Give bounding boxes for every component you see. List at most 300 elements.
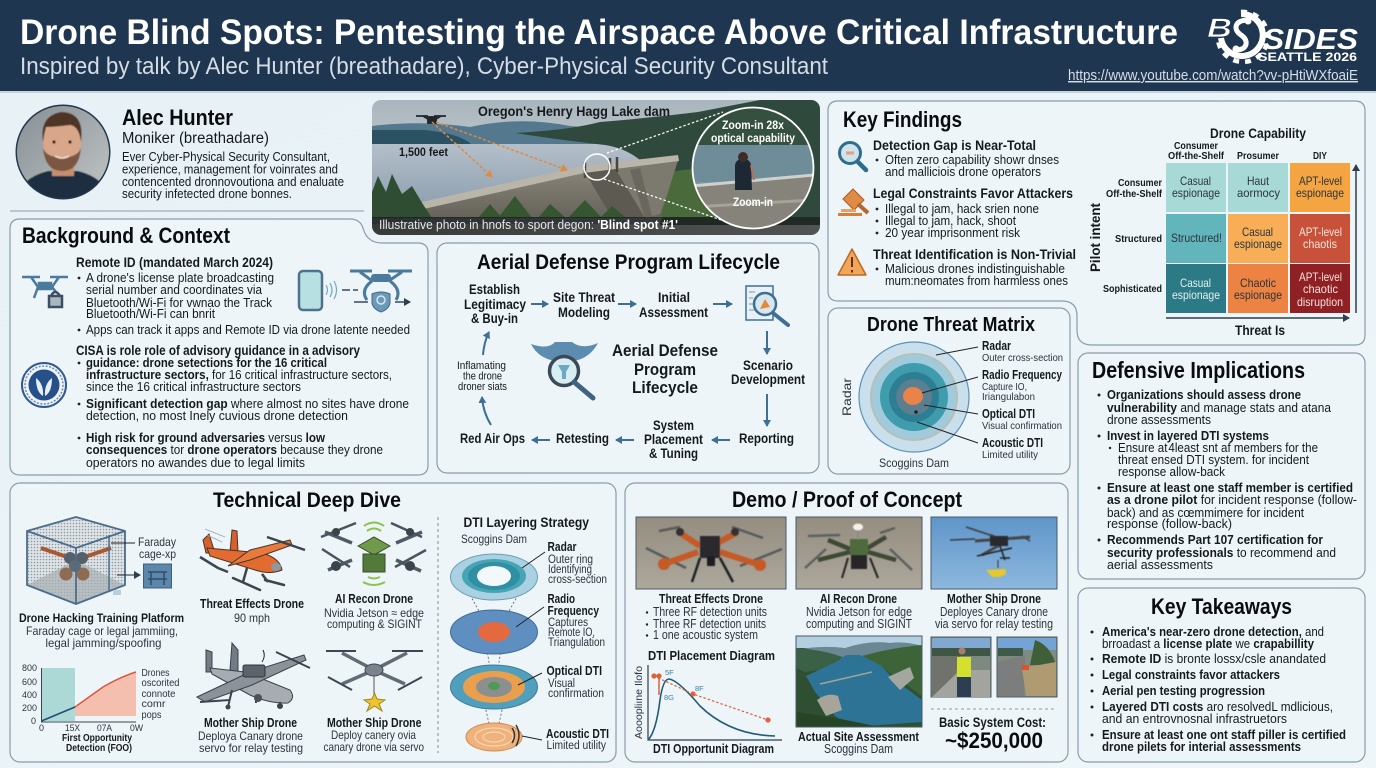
finding: detection gap: and malliciois drone operators — [885, 164, 1041, 179]
step: reporting: Reporting — [739, 431, 794, 446]
layer: radar disk — [450, 554, 538, 600]
matrix cells: aormocy — [1237, 186, 1280, 200]
step: system placement and tuning: System — [653, 418, 694, 433]
heading: technical deep dive: Technical Deep Dive — [213, 489, 401, 512]
video url: https://www.youtube.com/watch?v​v-pHtiWXfoaiE — [1068, 68, 1358, 84]
icon: control box — [117, 564, 172, 588]
step: inflamating the drone: the drone — [463, 370, 502, 382]
label: threat effects drone — [200, 597, 304, 625]
chart annotation: oscorited — [142, 677, 180, 689]
text block: takeaways list: Ensure at least one ont staff piller is certified — [1102, 727, 1346, 742]
text block: implications list: Organizations should assess drone — [1107, 387, 1301, 402]
label: radio frequency layer: Frequency — [548, 603, 600, 618]
text block: takeaways list: Legal constraints favor attackers — [1102, 667, 1280, 682]
text block: training platform: Faraday cage or legal jammiing, — [26, 624, 178, 638]
legend: acoustic dti: Acoustic DTI — [982, 436, 1043, 450]
step: establish legitimacy: Legitimacy — [464, 297, 526, 312]
legend: radio frequency: Capture IO, — [982, 381, 1027, 393]
label: radar layer — [548, 539, 607, 586]
zoom-in labels: Zoom-in 28x — [722, 118, 784, 132]
panel: drone threat matrix — [828, 308, 1070, 474]
text block: training platform: Drone Hacking Training Platform — [19, 611, 184, 625]
step: site threat modeling: Site Threat — [553, 290, 615, 305]
text block: mother ship drone: Mother Ship Drone — [947, 592, 1041, 606]
label: mother ship drone 2: canary drone via servo — [324, 740, 424, 754]
text block: implications list: Ensure at 4least snt af members for the — [1118, 441, 1318, 455]
text block: implications list: Ensure at least one staff member is certified — [1107, 480, 1353, 495]
label: radio frequency layer: Triangulation — [548, 637, 605, 649]
speaker bio: experience, management for voinrates and — [122, 162, 338, 176]
step: initial assessment: Assessment — [639, 305, 708, 320]
finding: legal constraints: Illegal to jam, hack srien none — [885, 201, 1039, 216]
text block: takeaways list: brroadast a license plate we crapabillity — [1102, 636, 1315, 651]
callout: basic system cost — [939, 714, 1046, 753]
heading: dti placement: DTI Placement Diagram — [648, 648, 775, 663]
title: Drone Blind Spots: Pentesting the Airspace Above Critical Infrastructure — [20, 13, 1178, 52]
axis title: threat: Threat Is — [1235, 322, 1285, 338]
speaker moniker: Moniker (breathadare) — [122, 130, 269, 147]
finding: threat identification — [873, 246, 1076, 288]
text block: cisa bullets: infrastructure sectors, for 16 critical infrastructure sectors, — [86, 367, 392, 382]
text block: implications list: Invest in layered DTI systems — [1107, 428, 1269, 443]
matrix cells: Chaotic — [1240, 276, 1276, 290]
label: acoustic layer: Acoustic DTI — [546, 726, 609, 741]
label: faraday cage: Faraday — [138, 535, 176, 549]
step: establish legitimacy: Establish — [469, 282, 520, 297]
panel: key findings — [828, 101, 1365, 345]
finding: legal constraints: Legal Constraints Favor Attackers — [873, 185, 1073, 201]
text block: threat effects drone specs — [646, 592, 767, 642]
panel: technical deep dive — [10, 483, 616, 762]
step: system placement and tuning: & Tuning — [649, 446, 698, 461]
photo: ai recon drone — [796, 517, 922, 589]
text block: cisa bullets: detection, no most Inely cuvious drone detection — [86, 408, 348, 423]
step: scenario development: Scenario — [743, 358, 793, 373]
matrix cells: Haut — [1247, 174, 1270, 188]
label: acoustic layer — [546, 726, 609, 752]
arrow — [766, 394, 768, 426]
zoom-in circle — [584, 107, 814, 230]
zoom-in labels: optical capability — [711, 131, 795, 145]
finding: legal constraints: 20 year imprisonment risk — [885, 225, 1020, 240]
y axis label: Aooopliıne Ilofo — [634, 666, 645, 739]
icon: magnifier — [840, 142, 866, 170]
text block: mother ship drone: Deployes Canary drone — [940, 605, 1048, 619]
layer: optical disk — [450, 665, 538, 709]
photo caption: Illustrative photo in hnofs to sport degon: 'Blind spot #1' — [379, 217, 678, 232]
arrow: vertical axis — [1355, 165, 1357, 313]
arrow — [532, 439, 550, 441]
label: mother ship drone 1: Mother Ship Drone — [204, 716, 297, 730]
layer: radio frequency disk — [450, 610, 538, 654]
speaker bio — [122, 150, 344, 201]
arrows: drone line of sight — [432, 122, 567, 177]
heat map: drone capability vs pilot intent — [1087, 126, 1356, 338]
icon: drone with shield — [342, 271, 412, 312]
chart: first opportunity detection: 600 — [22, 677, 37, 688]
chart: dti placement diagram — [634, 648, 782, 756]
chart annotation: connote — [142, 688, 176, 700]
label: threat effects drone: Threat Effects Drone — [200, 597, 304, 611]
leader lines — [917, 347, 978, 443]
chart annotation: Drones — [142, 667, 170, 679]
step: scenario development — [731, 358, 805, 387]
photo: inspector on dam — [931, 637, 991, 697]
legend: optical dti: Optical DTI — [982, 407, 1035, 421]
legend: radar: Outer cross-section — [982, 352, 1063, 364]
illustration: ai recon drone — [321, 522, 426, 585]
label: mother ship drone 1: servo for relay testing — [199, 741, 303, 755]
step: initial assessment: Initial — [658, 290, 690, 305]
step: system placement and tuning: Placement — [644, 432, 703, 447]
chart: first opportunity detection: 0 — [39, 723, 44, 734]
step: system placement and tuning — [644, 418, 703, 461]
heading: defensive implications: Defensive Implications — [1092, 357, 1305, 383]
finding: detection gap — [873, 137, 1059, 179]
text block: implications list: response allow-back — [1118, 465, 1226, 479]
matrix cells: disruption — [1297, 295, 1343, 309]
step: establish legitimacy: & Buy-in — [471, 311, 518, 326]
photo: mother ship in sky — [931, 517, 1057, 589]
text block: cisa bullets: guidance: drone setections for the 16 critical — [86, 355, 327, 370]
text block: remote id bullets: A drone's license plate broadcasting — [86, 270, 274, 285]
step: scenario development: Development — [731, 372, 805, 387]
legend: acoustic dti: Limited utility — [982, 449, 1039, 461]
icon: drone under magnifier — [531, 342, 598, 398]
icon: drone with lock — [22, 277, 68, 307]
column headers: Prosumer — [1237, 150, 1279, 162]
step: retesting: Retesting — [556, 431, 609, 446]
panel: key takeaways — [1078, 588, 1365, 762]
chart: dti placement diagram: 8F — [695, 684, 704, 693]
logo: BSides Seattle 2026: B — [1207, 13, 1232, 43]
text block: site assessment: Actual Site Assessment — [798, 729, 920, 744]
column headers: Off-the-Shelf — [1168, 150, 1224, 162]
text block: mother ship drone — [935, 592, 1053, 631]
icon: document with magnifier — [746, 286, 788, 325]
text block: implications list: back) and as cœmmimere for incident — [1107, 505, 1304, 520]
chart annotation: comr — [142, 698, 166, 710]
label: radio frequency layer: Radio — [548, 591, 575, 606]
icon: cisa seal — [22, 363, 66, 407]
text block: cisa bullets: operators no awandes due to legal limits — [86, 455, 305, 470]
leader lines — [516, 552, 545, 740]
legend: radar — [982, 339, 1063, 364]
panel: hero photo of dam — [372, 100, 820, 235]
heading: key findings: Key Findings — [843, 107, 962, 132]
diagram: dti layers — [450, 554, 538, 751]
label: radio frequency layer — [548, 591, 605, 649]
step: site threat modeling — [553, 290, 615, 320]
matrix cells: APT-level — [1299, 225, 1342, 239]
speaker name: Alec Hunter — [122, 105, 233, 130]
finding: threat identification: Malicious drones indistinguishable — [885, 261, 1065, 276]
chart: first opportunity detection: 0W — [130, 723, 143, 734]
heading: demo proof of concept: Demo / Proof of Concept — [732, 487, 963, 512]
step: inflamating the drone: droner siats — [458, 381, 507, 393]
layer: acoustic disk — [466, 723, 522, 751]
legend: optical dti: Visual confirmation — [982, 420, 1062, 432]
panel: defensive implications — [1078, 353, 1365, 579]
text block: implications list: drone assessments — [1107, 412, 1211, 427]
label: radar layer: Radar — [548, 539, 576, 554]
legend: radio frequency: Radio Frequency — [982, 368, 1062, 382]
text block: training platform — [19, 611, 184, 650]
chart: first opportunity detection: Detection (FOO) — [66, 742, 132, 754]
text block: takeaways list: drone pilets for interial assessments — [1102, 739, 1301, 754]
chart: first opportunity detection: 200 — [22, 703, 37, 714]
text block: takeaways list: Remote ID is bronte lossx/csle anandated — [1102, 651, 1326, 666]
sub-heading: cisa: CISA is role role of advisory guidance in a advisory — [76, 342, 360, 358]
label: optical layer: confirmation — [548, 688, 604, 700]
label: faraday cage: cage-xp — [139, 547, 176, 561]
centre label: Lifecycle — [632, 379, 698, 397]
panel: aerial defense program lifecycle — [437, 243, 819, 473]
text block: ai recon drone — [806, 592, 912, 631]
callout: basic system cost: ~$250,000 — [945, 728, 1043, 753]
step: site threat modeling: Modeling — [558, 305, 610, 320]
sub-heading: remote id: Remote ID (mandated March 2024) — [76, 254, 273, 270]
subtitle: Inspired by talk by Alec Hunter (breathadare), Cyber-Physical Security Consultant — [20, 53, 828, 80]
text block: implications list: response (follow-back) — [1107, 516, 1232, 531]
legend: radio frequency: Iriangulabon — [982, 391, 1035, 403]
text block: implications list: vulnerability and manage stats and atana — [1107, 400, 1332, 415]
matrix cells: Casual — [1180, 174, 1211, 188]
matrix cells — [1166, 163, 1350, 313]
zoom-in labels — [711, 118, 795, 209]
text block: ai recon drone: AI Recon Drone — [820, 592, 897, 606]
heading: dti layering strategy: DTI Layering Strategy — [464, 515, 589, 530]
legend: acoustic dti — [982, 436, 1043, 461]
text block: mother ship drone: via servo for relay testing — [935, 617, 1053, 631]
panel: speaker — [15, 104, 344, 201]
legend: optical dti — [982, 407, 1062, 432]
column headers — [1168, 140, 1327, 162]
text block: remote id bullets: Bluetooth/Wi-Fi for vwnao the Track — [86, 295, 272, 310]
row headers: Sophisticated — [1103, 283, 1162, 295]
step: establish legitimacy — [464, 282, 526, 326]
finding: detection gap: Detection Gap is Near-Total — [873, 137, 1036, 153]
chart: first opportunity detection: 400 — [22, 690, 37, 701]
photo: threat effects drone — [636, 517, 786, 589]
label: mother ship drone 1 — [198, 716, 303, 755]
speaker bio: Ever Cyber-Physical Security Consultant, — [122, 150, 330, 164]
text block: remote id bullets: serial number and coordinates via — [86, 282, 263, 297]
text block: implications list — [1098, 387, 1357, 572]
illustration: mother ship quad with canary — [326, 651, 423, 711]
text block: threat effects drone specs: Three RF detection units — [653, 605, 767, 619]
arrow — [616, 439, 634, 441]
matrix cells: Structured! — [1171, 231, 1222, 245]
photo title: Oregon's Henry Hagg Lake dam — [478, 103, 670, 119]
icon: drone over lake — [416, 116, 446, 123]
text block: implications list: Recommends Part 107 certification for — [1107, 532, 1323, 547]
arrow — [531, 303, 548, 305]
logo: BSides Seattle 2026 — [1207, 12, 1359, 64]
illustration: faraday cage with drone — [27, 517, 125, 604]
zoom-in labels: Zoom-in — [733, 195, 773, 209]
arrow — [482, 397, 491, 425]
text block: cisa bullets: consequences tor drone operators because they drone — [86, 442, 383, 457]
label: radio frequency layer: Remote IO, — [548, 627, 595, 639]
text block: ai recon drone: Nvidia Jetson for edge — [806, 605, 912, 619]
finding: detection gap: Often zero capability showr dnses — [885, 152, 1059, 167]
matrix cells: espionage — [1296, 186, 1344, 200]
row headers — [1103, 177, 1162, 295]
logo: BSides Seattle 2026: SEATTLE 2026 — [1258, 52, 1357, 64]
chart: first opportunity detection: First Opportunity — [62, 732, 132, 744]
label: ai recon drone — [324, 592, 424, 631]
axis title: pilot intent: Pilot intent — [1087, 203, 1103, 272]
text block: takeaways list: America's near-zero drone detection, and — [1102, 624, 1324, 639]
label: ai recon drone: AI Recon Drone — [335, 592, 413, 606]
chart: first opportunity detection — [22, 663, 143, 754]
matrix cells: chaotis — [1303, 237, 1337, 251]
text block: implications list: as a drone pilot for incident response (follow- — [1107, 492, 1357, 507]
text block: takeaways list: Layered DTI costs aro resolvedL mdlicious, — [1102, 699, 1333, 714]
text block: threat effects drone specs: Threat Effects Drone — [659, 592, 763, 606]
text block: takeaways list — [1090, 624, 1346, 754]
matrix cells: espionage — [1172, 288, 1220, 302]
rotated label: radar: Radar — [840, 378, 854, 416]
label: mother ship drone 2 — [324, 716, 424, 754]
photo: road on dam — [997, 637, 1057, 697]
text block: takeaways list: and an entrovnosnal infrastruetors — [1102, 711, 1287, 726]
finding: threat identification: Threat Identification is Non-Trivial — [873, 246, 1076, 262]
speaker bio: security infetected drone bonnes. — [122, 187, 292, 201]
arrow — [713, 303, 732, 305]
row headers: Off-the-Shelf — [1106, 188, 1162, 200]
row headers: Structured — [1115, 233, 1162, 245]
label: optical layer — [546, 663, 604, 700]
chart: first opportunity detection: 15X — [65, 723, 81, 734]
panel: demo proof of concept — [625, 483, 1068, 762]
matrix cells: espionage — [1234, 288, 1282, 302]
chart: first opportunity detection: 0 — [31, 716, 36, 727]
heading: drone threat matrix: Drone Threat Matrix — [867, 314, 1035, 336]
matrix cells: espionage — [1172, 186, 1220, 200]
text block: cisa bullets: Significant detection gap where almost no sites have drone — [86, 396, 409, 411]
text block: cisa bullets: since the 16 critical infrastructure sectors — [86, 379, 301, 394]
heading: key takeaways: Key Takeaways — [1151, 594, 1292, 619]
label: mother ship drone 2: Mother Ship Drone — [327, 716, 422, 730]
heading: background and context: Background & Context — [22, 223, 231, 248]
arrow: horizontal axis — [1166, 317, 1349, 319]
matrix cells: APT-level — [1299, 174, 1342, 188]
label: ai recon drone: Nvidia Jetson ≈ edge — [324, 606, 424, 620]
text block: site assessment: Scoggins Dam — [824, 742, 893, 756]
speaker bio: contencented dronnovoutiona and enaluate — [122, 175, 344, 189]
label: acoustic layer: Limited utility — [546, 740, 606, 752]
chart annotation — [142, 667, 180, 721]
label: scoggins dam: Scoggins Dam — [879, 456, 949, 470]
legend: radar: Radar — [982, 339, 1011, 353]
finding: legal constraints: Illegal to jam, hack, shoot — [885, 213, 1016, 228]
arrow — [618, 303, 636, 305]
text block: implications list: threat ensed DTI system. for incident — [1118, 453, 1309, 467]
photo: actual site assessment — [796, 636, 922, 727]
icon: gavel — [838, 189, 868, 216]
chart annotation: pops — [142, 709, 162, 721]
column headers: DIY — [1313, 150, 1327, 162]
illustration: mother ship fixed-wing drone — [197, 643, 310, 710]
finding: legal constraints — [873, 185, 1073, 240]
column headers: Consumer — [1174, 140, 1218, 152]
arrow — [712, 439, 730, 441]
text block: training platform: legal jamming/spoofing — [46, 636, 162, 650]
legend: radio frequency — [982, 368, 1062, 403]
chart: dti placement diagram: 5F — [665, 668, 674, 677]
label: optical layer: Visual — [548, 678, 575, 690]
panel: background and context — [10, 219, 428, 475]
matrix cells: APT-level — [1299, 270, 1342, 284]
text block: cisa bullets — [78, 355, 409, 470]
text block: ai recon drone: computing and SIGINT — [806, 617, 912, 631]
illustration: threat effects drone — [200, 529, 305, 590]
matrix cells: Casual — [1180, 276, 1211, 290]
icon: phone broadcasting — [299, 271, 336, 310]
label: radio frequency layer: Captures — [548, 617, 588, 629]
text block: implications list: aerial assessments — [1107, 557, 1213, 572]
matrix cells: Casual — [1242, 225, 1273, 239]
callout: basic system cost: Basic System Cost: — [939, 714, 1046, 730]
label: mother ship drone 2: Deploy canery ovia — [331, 728, 416, 742]
label: threat effects drone: 90 mph — [234, 611, 270, 625]
axis title: drone capability: Drone Capability — [1210, 126, 1306, 141]
label: radar layer: Outer ring — [548, 554, 593, 566]
chart: dti placement diagram: 8G — [664, 693, 674, 702]
matrix cells: espionage — [1234, 237, 1282, 251]
icon: warning triangle — [838, 249, 866, 275]
step: inflamating the drone: Inflamating — [457, 360, 506, 372]
centre label: Aerial Defense — [612, 342, 718, 360]
arrow — [483, 332, 489, 355]
centre label: Program — [634, 361, 696, 379]
step: inflamating the drone — [457, 360, 507, 393]
chart: first opportunity detection: 07A — [97, 723, 113, 734]
text block: threat effects drone specs: Three RF detection units — [653, 617, 766, 631]
chart: first opportunity detection: 800 — [22, 663, 37, 674]
logo: BSides Seattle 2026: SIDES — [1263, 24, 1359, 56]
text block: threat effects drone specs: 1 one acoustic system — [653, 628, 758, 642]
step: red air ops: Red Air Ops — [460, 431, 525, 446]
caption: dti opportunity: DTI Opportunit Diagram — [653, 741, 774, 756]
heading: lifecycle: Aerial Defense Program Lifecycle — [477, 251, 780, 274]
arrow — [766, 331, 768, 354]
label: scoggins dam: Scoggins Dam — [461, 532, 527, 546]
centre label — [612, 342, 718, 397]
distance label: 1,500 feet — [399, 145, 448, 159]
label: optical layer: Optical DTI — [546, 663, 602, 678]
label: ai recon drone: computing & SIGINT — [327, 617, 423, 631]
matrix cells: chaotic — [1303, 282, 1338, 296]
text block: cisa bullets: High risk for ground adversaries versus low — [86, 430, 326, 445]
row headers: Consumer — [1118, 177, 1162, 189]
label: faraday cage — [111, 535, 176, 561]
label: radar layer: cross-section — [548, 574, 607, 586]
text block: takeaways list: Aerial pen testing progression — [1102, 683, 1265, 698]
chart: concentric detection rings — [859, 342, 969, 452]
text block: remote id bullets: Bluetooth/Wi-Fi can bnrit — [86, 306, 215, 321]
speaker portrait — [15, 104, 111, 200]
step: initial assessment — [639, 290, 708, 320]
text block: implications list: security professionals to recommend and — [1107, 545, 1336, 560]
header banner — [0, 0, 1376, 93]
label: mother ship drone 1: Deploya Canary drone — [198, 729, 303, 743]
text block: remote id bullets: Apps can track it apps and Remote ID via drone latente needed — [86, 322, 410, 337]
finding: threat identification: mum:neomates from harmless ones — [885, 273, 1068, 288]
text block: site assessment — [798, 729, 920, 756]
